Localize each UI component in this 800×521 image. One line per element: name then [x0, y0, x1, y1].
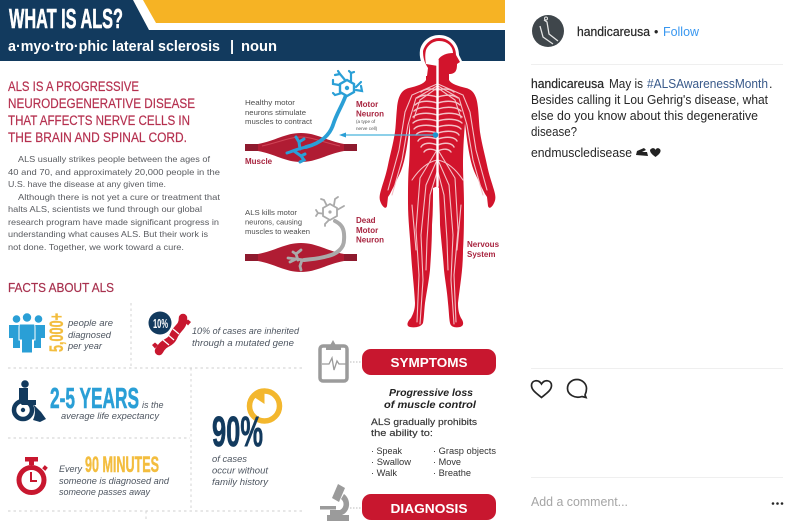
stat: 90 minutes: 90 MINUTES	[85, 452, 159, 477]
text: people diagnosed: people are	[67, 318, 113, 328]
heading: ALS definition: THAT AFFECTS NERVE CELLS IN	[8, 113, 190, 128]
stat: 2-5 years: 2-5 YEARS	[50, 383, 139, 415]
caption: May is	[609, 77, 643, 91]
diagram: weakened muscle	[245, 243, 357, 272]
subtitle: |	[230, 39, 234, 55]
text: people diagnosed: per year	[67, 341, 103, 351]
text: motor neuron label: Neuron	[356, 110, 384, 118]
text: ALS neuron caption: neurons, causing	[245, 218, 302, 226]
stat: 90 percent: family history	[212, 477, 269, 487]
text block: ALS description: understanding what causes ALS. But their work is	[8, 229, 208, 239]
list: abilities: · Walk	[371, 468, 398, 478]
text: symptoms subtitle: Progressive loss	[389, 387, 473, 399]
text: muscle label: Muscle	[245, 157, 273, 166]
text: dead motor neuron label: Neuron	[356, 236, 384, 244]
heading: ALS definition: NEURODEGENERATIVE DISEASE	[8, 96, 195, 111]
symptoms pill: SYMPTOMS	[390, 355, 468, 370]
text: healthy neuron caption: muscles to contract	[245, 117, 313, 126]
icon: clipboard	[320, 340, 347, 381]
list: abilities: · Move	[433, 457, 461, 467]
list: abilities: · Swallow	[371, 457, 412, 467]
text: inherited cases: 10% of cases are inherited	[192, 326, 300, 336]
text block: ALS description: 40 and 70, and approximately 20,000 people in the	[8, 167, 220, 177]
text: ALS neuron caption: ALS kills motor	[245, 208, 297, 217]
post author: •	[654, 25, 658, 39]
diagram: human body nervous system	[380, 35, 495, 327]
heading: facts about ALS: FACTS ABOUT ALS	[8, 281, 114, 295]
stat: 90 percent: of cases	[212, 454, 248, 464]
text: motor neuron label: nerve cell)	[356, 126, 378, 131]
stat: 90 minutes: someone is diagnosed and	[59, 476, 170, 486]
list: abilities	[371, 446, 497, 478]
text: nervous system label	[467, 240, 500, 259]
text: nervous system label: Nervous	[467, 240, 500, 249]
text: motor neuron label	[356, 100, 384, 131]
caption	[531, 77, 772, 160]
text: healthy neuron caption: Healthy motor	[245, 98, 295, 107]
text: symptoms subtitle: of muscle control	[384, 399, 477, 411]
text: inherited cases	[192, 326, 300, 348]
icon: avatar	[532, 15, 564, 47]
caption: endmuscledisease	[531, 146, 632, 160]
text block: ALS description: U.S. have the disease at any given time.	[8, 179, 166, 189]
heading: ALS definition: THE BRAIN AND SPINAL CORD.	[8, 130, 187, 145]
text: nervous system label: System	[467, 250, 495, 259]
icon: more options	[772, 502, 783, 505]
icon: heart	[532, 381, 552, 398]
stat: 90 percent: 90%	[212, 408, 263, 456]
caption: disease?	[531, 125, 577, 139]
stat: 2-5 years: is the	[142, 400, 164, 410]
text: dead motor neuron label	[356, 216, 384, 244]
caption: else do you know about this degenerative	[531, 109, 758, 123]
list: abilities: · Breathe	[433, 468, 471, 478]
text block: ALS description: halts ALS, scientists we fund through our global	[8, 204, 202, 214]
stat: 90 minutes	[59, 452, 170, 497]
icon: comment bubble	[568, 380, 586, 398]
text block: ALS description: Although there is not yet a cure or treatment that	[18, 192, 221, 202]
caption: #ALSAwarenessMonth	[647, 77, 768, 91]
icon: DNA with 10 percent badge: 10%	[153, 316, 168, 331]
text: healthy neuron caption: neurons stimulate	[245, 108, 306, 117]
text block: ALS description: not done. Together, we work toward a cure.	[8, 242, 184, 252]
text: dead motor neuron label: Motor	[356, 226, 378, 235]
stat: 2-5 years	[50, 383, 164, 421]
chart: 90 percent ring	[250, 391, 280, 421]
caption: Besides calling it Lou Gehrig's disease, what	[531, 93, 769, 107]
post author	[577, 25, 700, 39]
post author: handicareusa	[577, 25, 650, 39]
heading: ALS definition	[8, 79, 195, 145]
diagram: healthy muscle	[245, 133, 357, 162]
torso and limbs	[380, 76, 495, 327]
symptoms pill	[362, 349, 496, 375]
icon: microscope	[320, 484, 349, 521]
panel: header banner	[0, 0, 505, 61]
text: motor neuron label: Motor	[356, 100, 378, 109]
caption: .	[769, 77, 772, 91]
stat: 5,000+: 5,000+	[47, 313, 68, 352]
stat: 2-5 years: average life expectancy	[61, 411, 160, 421]
text: motor neuron label: (a type of	[356, 119, 376, 124]
head	[420, 35, 462, 84]
heading: ALS definition: ALS IS A PROGRESSIVE	[8, 79, 139, 94]
list: abilities: · Speak	[371, 446, 402, 456]
stat: 90 minutes: Every	[59, 464, 83, 474]
comment input: Add a comment...	[531, 495, 628, 509]
text: people diagnosed: diagnosed	[68, 330, 112, 340]
icon: wheelchair	[14, 380, 46, 422]
text: symptoms intro: ALS gradually prohibits	[371, 417, 478, 427]
diagnosis pill: DIAGNOSIS	[390, 501, 468, 516]
caption: handicareusa	[531, 77, 604, 91]
diagram: healthy motor neuron	[287, 71, 362, 162]
subtitle: a·myo·tro·phic lateral sclerosis	[8, 39, 220, 55]
text: symptoms intro: the ability to:	[371, 428, 433, 438]
text: symptoms subtitle	[384, 387, 477, 411]
text: ALS neuron caption: muscles to weaken	[245, 227, 310, 236]
icon: DNA with 10 percent badge	[148, 312, 191, 351]
diagnosis pill	[362, 494, 496, 520]
icon: stopwatch	[19, 457, 48, 492]
text block: ALS description: ALS usually strikes people between the ages of	[18, 154, 211, 164]
text: dead motor neuron label: Dead	[356, 216, 376, 225]
subtitle: noun	[241, 39, 277, 55]
text block: ALS description	[8, 154, 221, 252]
stat: 90 percent	[212, 408, 269, 487]
arrow: spinal cord to motor neuron	[339, 132, 438, 138]
icon: group of people	[9, 313, 45, 353]
text: healthy neuron caption	[245, 98, 313, 126]
post author: Follow	[663, 25, 700, 39]
text: people diagnosed	[67, 318, 113, 351]
stat: 90 minutes: someone passes away	[59, 487, 150, 497]
title: WHAT IS ALS?	[9, 3, 123, 34]
text: symptoms intro	[371, 417, 478, 438]
list: abilities: · Grasp objects	[433, 446, 497, 456]
nerves	[388, 60, 487, 324]
text: ALS neuron caption	[245, 208, 310, 236]
text block: ALS description: research program have made significant progress in	[8, 217, 219, 227]
stat: 90 percent: occur without	[212, 466, 269, 476]
text: inherited cases: through a mutated gene	[192, 338, 294, 348]
diagram: dead motor neuron	[288, 197, 344, 270]
